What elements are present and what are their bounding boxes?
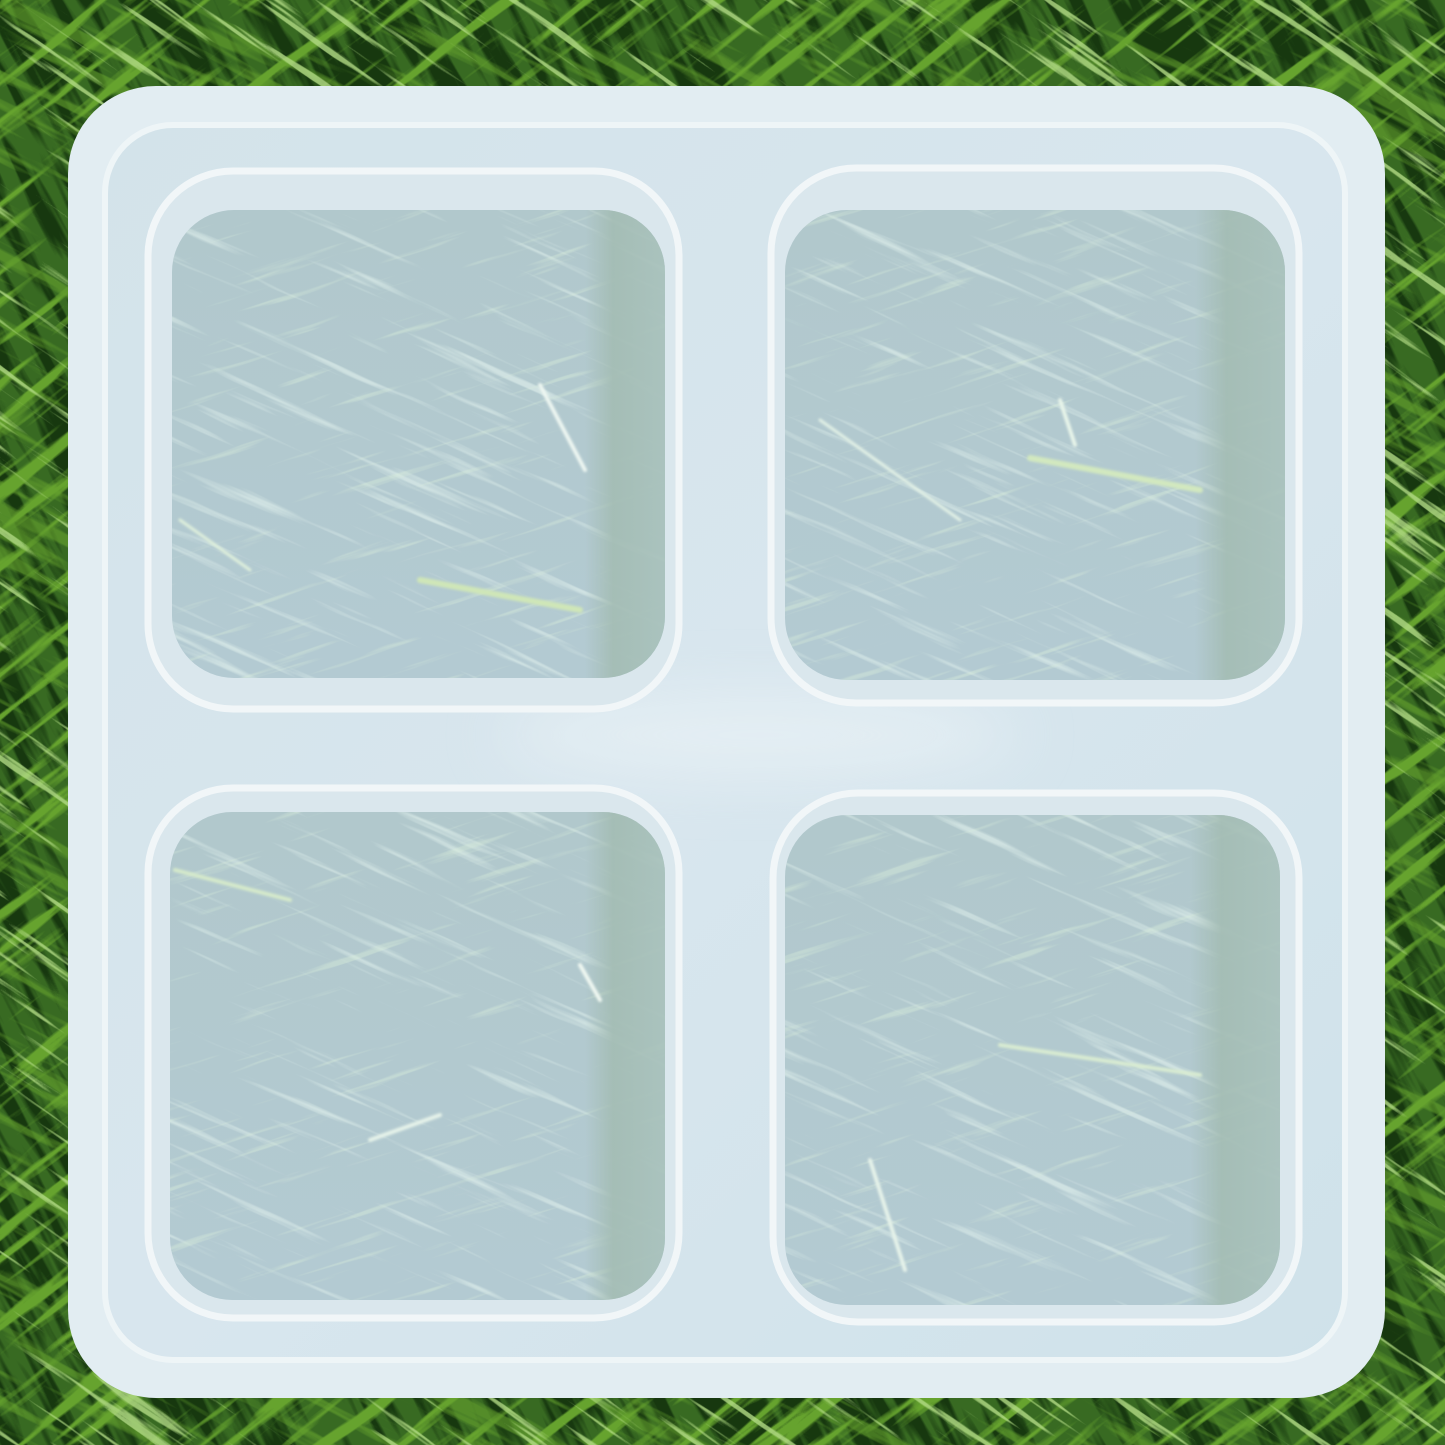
well: bottom left	[148, 788, 679, 1318]
well: bottom right	[773, 793, 1299, 1322]
well: top right	[771, 168, 1299, 703]
light glare on mold body	[500, 695, 1020, 775]
well: top left	[148, 171, 679, 709]
mold inner ridge	[105, 125, 1345, 1360]
